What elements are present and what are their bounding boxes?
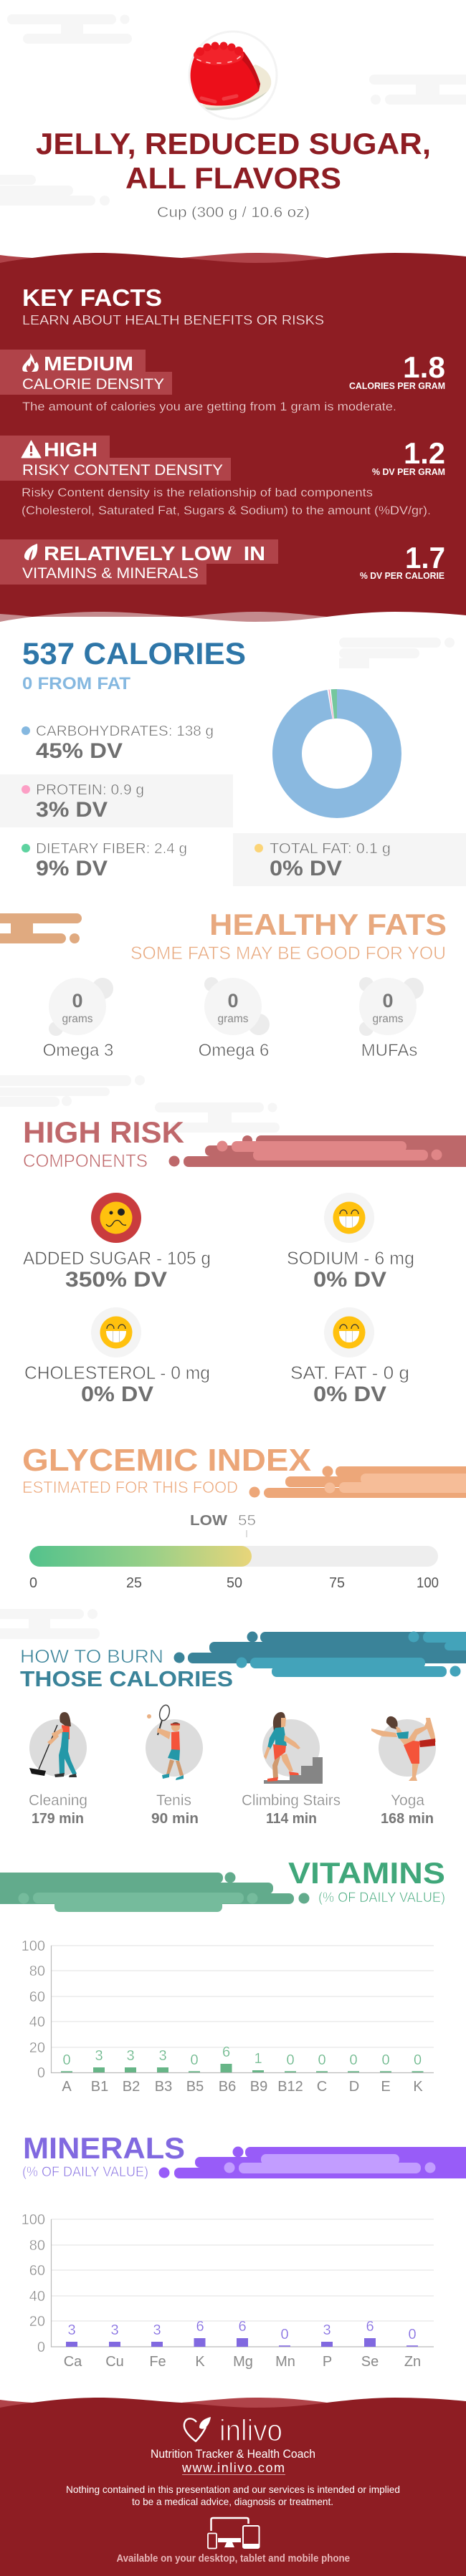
chart: glycemic index gauge [29, 1513, 439, 1591]
activity: climbing stairs [242, 1712, 341, 1827]
activity: yoga [371, 1716, 436, 1827]
bar chart: minerals: 0 [37, 2340, 45, 2355]
heading: high risk: HIGH RISK [23, 1115, 184, 1149]
fact: vitamins and minerals [0, 539, 445, 585]
heading: 537 calories: 537 CALORIES [22, 637, 246, 671]
item: sodium: 0% DV [313, 1268, 386, 1292]
subheading: from fat: 0 FROM FAT [22, 674, 130, 693]
stat: mufas: MUFAs [361, 1041, 417, 1060]
item: added sugar: ADDED SUGAR - 105 g [23, 1249, 211, 1269]
bar chart: minerals: 3 [153, 2322, 161, 2338]
bar chart: minerals: 20 [29, 2314, 45, 2330]
bar chart: vitamins: 60 [29, 1989, 45, 2005]
panel: key facts [0, 253, 466, 622]
bar chart: vitamins: B1 [91, 2079, 108, 2095]
stat: 1.8 calories per gram: 1.8 [403, 350, 445, 384]
band: vitamins [0, 1873, 310, 1912]
item: dietary fiber: 9% DV [36, 857, 108, 880]
fact: calorie density: MEDIUM [44, 352, 133, 375]
item: saturated fat: SAT. FAT - 0 g [290, 1363, 409, 1383]
activity: cleaning [29, 1712, 87, 1827]
fact: risky content density: Risky Content density is the relationship of bad components [22, 486, 373, 499]
fact: risky content density: HIGH [44, 438, 98, 461]
bar chart: vitamins: 1 [254, 2051, 262, 2067]
bar chart: vitamins: B5 [186, 2079, 204, 2095]
subheading: minerals: (% OF DAILY VALUE) [22, 2165, 148, 2180]
bar chart: vitamins: 6 [222, 2044, 230, 2060]
item: total fat: TOTAL FAT: 0.1 g [270, 841, 391, 857]
disclaimer [66, 2484, 400, 2507]
donut chart [287, 689, 387, 804]
heading: vitamins: VITAMINS [288, 1856, 445, 1890]
stat: omega 3 [43, 978, 113, 1060]
activity: climbing stairs: Climbing Stairs [242, 1792, 341, 1809]
chart: glycemic index gauge: 25 [126, 1575, 142, 1591]
bar chart: minerals: P [323, 2354, 332, 2370]
item: protein: PROTEIN: 0.9 g [36, 782, 144, 798]
stat: 1.7 % dv per calorie: % DV PER CALORIE [360, 570, 444, 581]
icon: flame [22, 353, 39, 372]
stat: omega 6: 0 [227, 990, 239, 1011]
item: carbohydrates: 45% DV [36, 739, 123, 763]
serving size: Cup (300 g / 10.6 oz) [157, 205, 310, 221]
heading: how to burn those calories [20, 1645, 233, 1691]
chart: glycemic index gauge: 55 [238, 1513, 256, 1529]
tagline: Nutrition Tracker & Health Coach [151, 2447, 315, 2461]
bar chart: minerals: 3 [323, 2322, 331, 2338]
fact: calorie density [0, 350, 445, 413]
stat: omega 3: Omega 3 [43, 1041, 113, 1060]
activity: tennis: 90 min [151, 1811, 199, 1827]
heading: healthy fats: HEALTHY FATS [209, 908, 447, 941]
activity: climbing stairs: 114 min [266, 1811, 317, 1827]
stat: 1.7 % dv per calorie [360, 541, 445, 581]
item: carbohydrates: CARBOHYDRATES: 138 g [36, 724, 214, 739]
subheading: glycemic index: ESTIMATED FOR THIS FOOD [22, 1478, 238, 1496]
stat: mufas: grams [372, 1013, 404, 1025]
item: added sugar: 350% DV [65, 1268, 167, 1292]
link: website: www.inlivo.com [181, 2461, 285, 2475]
chart: glycemic index gauge: 75 [329, 1575, 345, 1591]
chart: glycemic index gauge: LOW [190, 1513, 227, 1529]
stat: omega 6: Omega 6 [199, 1041, 269, 1060]
disclaimer: to be a medical advice, diagnosis or treatment. [132, 2496, 333, 2507]
stat: omega 3: grams [62, 1013, 93, 1025]
bar chart: vitamins: 0 [414, 2052, 422, 2068]
fact: calorie density: The amount of calories you are getting from 1 gram is moderate. [22, 400, 396, 413]
bar chart: vitamins: B2 [123, 2079, 140, 2095]
bar chart: vitamins: D [349, 2079, 359, 2095]
title: ALL FLAVORS [125, 161, 341, 195]
bar chart: minerals: 6 [196, 2319, 204, 2335]
food photo: red jelly on a plate [189, 32, 277, 119]
item: protein: 3% DV [36, 798, 108, 822]
disclaimer: Nothing contained in this presentation and our services is intended or implied [66, 2484, 400, 2495]
bar chart: vitamins: 3 [126, 2048, 135, 2064]
chart: glycemic index gauge: 50 [227, 1575, 242, 1591]
bar chart: vitamins: 0 [318, 2052, 326, 2068]
bar chart: vitamins: E [381, 2079, 391, 2095]
bar chart: vitamins: 80 [29, 1964, 45, 1979]
bar chart: minerals: 80 [29, 2238, 45, 2254]
bar chart: vitamins: 100 [22, 1938, 45, 1954]
bar chart: minerals: 0 [280, 2327, 289, 2342]
bar chart: minerals: Zn [404, 2354, 421, 2370]
bar chart: vitamins: 0 [286, 2052, 295, 2068]
icon: devices [208, 2518, 260, 2549]
bar chart: minerals [22, 2212, 434, 2370]
bar chart: vitamins: 0 [190, 2052, 199, 2068]
bar chart: minerals: 0 [408, 2327, 417, 2342]
stat: omega 3: 0 [72, 990, 83, 1011]
panel: calories [0, 637, 466, 886]
item: dietary fiber: DIETARY FIBER: 2.4 g [36, 841, 187, 857]
bar chart: minerals: 100 [22, 2212, 45, 2228]
activity: yoga: Yoga [391, 1792, 424, 1809]
bar chart: vitamins: 3 [95, 2048, 103, 2064]
heading: minerals: MINERALS [23, 2131, 185, 2165]
icon: warning triangle [22, 441, 41, 458]
heading: key facts: KEY FACTS [22, 284, 162, 311]
bar chart: minerals: 3 [67, 2322, 76, 2338]
stat: 1.7 % dv per calorie: 1.7 [405, 541, 445, 575]
bar chart: vitamins: B3 [155, 2079, 172, 2095]
bar chart: minerals: Ca [64, 2354, 82, 2370]
bar chart: vitamins: A [62, 2079, 72, 2095]
heading: how to burn those calories: HOW TO BURN [20, 1645, 163, 1667]
title [36, 127, 431, 195]
logo: inlivo: inlivo [219, 2413, 282, 2447]
bar chart: vitamins: 0 [37, 2065, 45, 2081]
heading: glycemic index: GLYCEMIC INDEX [22, 1443, 311, 1478]
bar chart: minerals: 40 [29, 2289, 45, 2305]
item: sodium: SODIUM - 6 mg [287, 1249, 414, 1269]
bar chart: minerals: K [195, 2354, 205, 2370]
stat: mufas: 0 [382, 990, 394, 1011]
stat: omega 6 [199, 977, 270, 1060]
fact: vitamins and minerals: VITAMINS & MINERALS [22, 564, 199, 582]
bar chart: vitamins: B6 [219, 2079, 236, 2095]
stat: 1.8 calories per gram: CALORIES PER GRAM [349, 380, 445, 391]
logo: inlivo [184, 2413, 282, 2447]
fact: risky content density [0, 436, 445, 517]
activity: yoga: 168 min [381, 1811, 434, 1827]
stat: 1.8 calories per gram [349, 350, 445, 391]
subheading: healthy fats: SOME FATS MAY BE GOOD FOR YOU [130, 943, 446, 963]
bar chart: vitamins: C [317, 2079, 327, 2095]
item: protein [0, 774, 233, 827]
band: high risk [169, 1135, 466, 1167]
band: glycemic index [249, 1466, 466, 1498]
bar chart: vitamins: 40 [29, 2014, 45, 2030]
title: JELLY, REDUCED SUGAR, [36, 127, 431, 160]
item: cholesterol: 0% DV [81, 1383, 153, 1406]
item: sodium [287, 1193, 414, 1292]
band: minerals [159, 2146, 466, 2178]
bar chart: minerals: Fe [149, 2354, 166, 2370]
item: added sugar [23, 1193, 211, 1292]
item: total fat: 0% DV [270, 857, 342, 880]
availability note: Available on your desktop, tablet and mobile phone [116, 2553, 350, 2565]
band: how to burn [173, 1632, 466, 1677]
activity: tennis: Tenis [156, 1792, 191, 1809]
bar chart: minerals: Mn [275, 2354, 295, 2370]
fact: calorie density: CALORIE DENSITY [22, 375, 164, 393]
bar chart: minerals: 60 [29, 2263, 45, 2279]
heading: how to burn those calories: THOSE CALORIES [20, 1666, 233, 1691]
fact: vitamins and minerals: RELATIVELY LOW IN [44, 542, 265, 564]
bar chart: vitamins: B12 [277, 2079, 303, 2095]
stat: 1.2 % dv per gram: % DV PER GRAM [372, 466, 445, 477]
stat: 1.2 % dv per gram [372, 436, 445, 477]
item: cholesterol: CHOLESTEROL - 0 mg [24, 1363, 210, 1383]
subheading: vitamins: (% OF DAILY VALUE) [318, 1890, 445, 1905]
bar chart: vitamins: 0 [349, 2052, 358, 2068]
bar chart: vitamins: 0 [62, 2052, 71, 2068]
stat: 1.2 % dv per gram: 1.2 [404, 436, 445, 470]
subheading: components: COMPONENTS [23, 1151, 148, 1171]
bar chart: vitamins: 3 [158, 2048, 167, 2064]
chart: glycemic index gauge: 0 [29, 1575, 37, 1591]
bar chart: minerals: Se [361, 2354, 379, 2370]
activity: cleaning: Cleaning [29, 1792, 87, 1809]
subheading: LEARN ABOUT HEALTH BENEFITS OR RISKS [22, 312, 324, 327]
activity: cleaning: 179 min [32, 1811, 84, 1827]
bar chart: vitamins: K [413, 2079, 423, 2095]
fact: risky content density: (Cholesterol, Saturated Fat, Sugars & Sodium) to the amount (%DV/gr). [22, 504, 431, 517]
icon: leaf [24, 544, 37, 560]
panel: footer [0, 2398, 466, 2576]
bar chart: vitamins: 0 [381, 2052, 390, 2068]
item: total fat [233, 833, 466, 886]
item: dietary fiber [22, 841, 187, 880]
bar chart: vitamins: B9 [250, 2079, 267, 2095]
stat: omega 6: grams [217, 1013, 249, 1025]
item: saturated fat: 0% DV [313, 1383, 386, 1406]
bar chart: minerals: 6 [238, 2319, 247, 2335]
bar chart: vitamins: 20 [29, 2040, 45, 2056]
fact: risky content density: RISKY CONTENT DENSITY [22, 461, 223, 479]
activity: tennis [146, 1704, 203, 1827]
item: saturated fat [290, 1307, 409, 1406]
bar chart: minerals: 6 [366, 2319, 374, 2335]
stat: mufas [359, 977, 424, 1060]
bar chart: minerals: 3 [110, 2322, 119, 2338]
band: healthy fats [0, 913, 82, 943]
item: cholesterol [24, 1307, 210, 1406]
bar chart: vitamins [22, 1938, 434, 2095]
bar chart: minerals: Mg [233, 2354, 253, 2370]
item: carbohydrates [22, 724, 214, 763]
bar chart: minerals: Cu [105, 2354, 124, 2370]
chart: glycemic index gauge: 100 [417, 1575, 439, 1591]
